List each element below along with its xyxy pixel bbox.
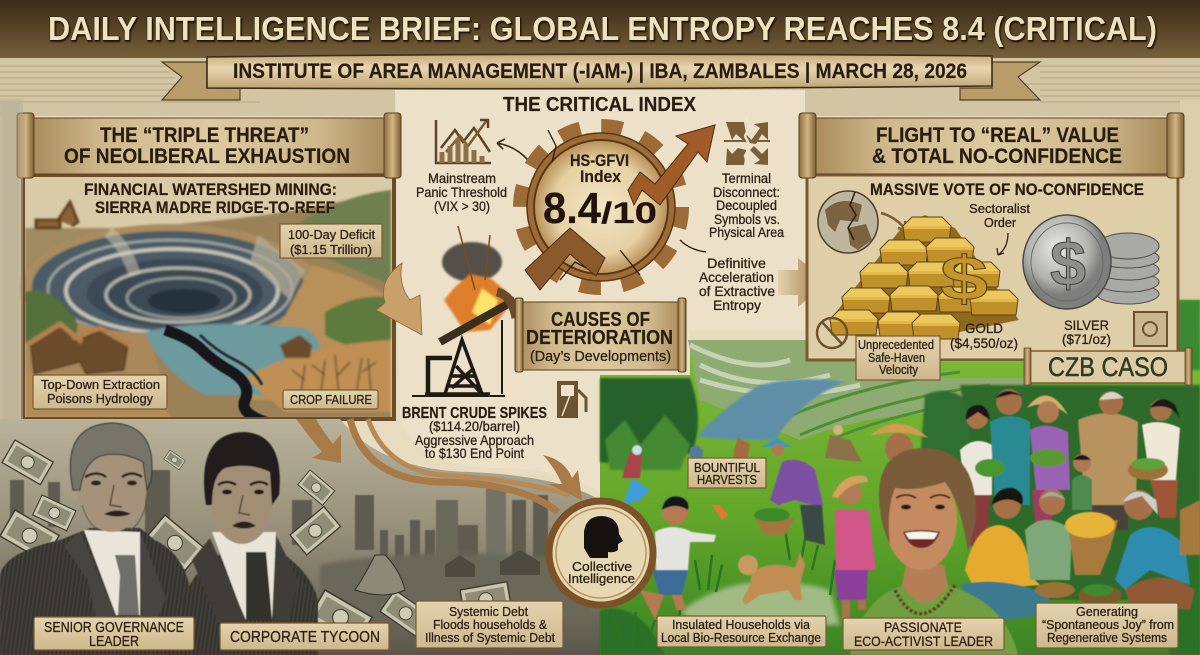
dog [738,552,805,605]
text: sectoralist order: Order [984,215,1017,230]
scene: regenerative community [600,300,1200,655]
text: definitive acceleration: Definitive [707,255,766,271]
label: systemic debt: Systemic Debt [449,604,528,619]
flooded paddy [680,581,840,625]
label: eco-activist leader: ECO-ACTIVIST LEADER [854,633,993,649]
callout: crop failure [283,390,378,409]
text: brent crude: ($114.20/barrel) [429,418,520,434]
falling bills [0,440,512,645]
text: sectoralist order [969,201,1030,255]
scroll: causes of deterioration: CAUSES OF [551,309,650,331]
text: definitive acceleration: Acceleration [699,269,774,285]
butterflies [623,478,728,520]
scroll: flight to real value [799,113,1184,178]
girl in pink [832,475,876,620]
label: safe-haven velocity [856,336,940,380]
heading: financial watershed mining [84,180,337,217]
scroll: triple threat: OF NEOLIBERAL EXHAUSTION [64,145,350,168]
label: senior governance leader: SENIOR GOVERNANCE [44,619,184,636]
collective intelligence badge: Intelligence [568,571,635,586]
callout: deficit: ($1.15 Trillion) [290,242,372,257]
text: definitive acceleration [699,255,775,313]
label: bountiful harvests [688,458,766,488]
river [700,379,845,440]
text: silver price: SILVER [1064,317,1109,333]
farmer in purple [754,438,825,545]
text: terminal disconnect: Physical Area [709,224,784,240]
gear index gauge: 8.4 [543,184,601,233]
jungle trees [600,300,1200,655]
label: safe-haven velocity: Safe-Haven [868,350,925,365]
text: terminal disconnect [709,170,784,240]
signature plate: CZB CASO [1048,352,1168,382]
text: terminal disconnect: Symbols vs. [714,211,780,227]
scroll: causes of deterioration [515,298,686,372]
scroll: flight to real value: FLIGHT TO “REAL” VALUE [876,124,1119,147]
man in straw hat [870,423,928,463]
arrow: rising entropy [628,125,715,205]
gear index gauge [521,125,715,290]
panel: financial watershed mining [20,175,394,447]
heading: financial watershed mining: FINANCIAL WATERSHED MINING: [84,180,337,199]
text: definitive acceleration: of Extractive [699,283,775,299]
callout: deficit [280,224,382,258]
label: insulated households: Insulated Households via [672,617,811,632]
scroll: causes of deterioration: (Day’s Developments) [530,348,671,365]
running boy [640,497,716,620]
callout: deficit: 100-Day Deficit [288,227,375,242]
group of villagers [960,389,1200,620]
text: terminal disconnect: Decoupled [716,197,777,213]
poisoned river [165,330,296,447]
label: spontaneous joy: “Spontaneous Joy” from [1042,617,1174,632]
scene: debt and collapse [0,100,600,655]
city skyline [10,470,548,565]
label: eco-activist leader [843,618,1004,650]
illustration: oil pump explosion [412,226,516,396]
arrow: to flight panel [778,258,828,307]
index heading: THE CRITICAL INDEX [503,94,697,116]
callout: extraction: Poisons Hydrology [47,391,153,406]
label: systemic debt [416,601,563,648]
callout: crop failure: CROP FAILURE [290,392,372,407]
silver coins [1023,215,1159,309]
label: systemic debt: Floods households & [433,617,547,632]
label: bountiful harvests: BOUNTIFUL [694,460,760,475]
label: systemic debt: Illness of Systemic Debt [425,630,555,645]
text: mainstream panic threshold: (VIX > 30) [434,198,490,214]
scroll: causes of deterioration: DETERIORATION [526,327,673,349]
text: mainstream panic threshold: Panic Threshold [416,184,507,200]
debt bag [355,555,405,595]
callout: extraction: Top-Down Extraction [41,377,160,392]
icon: fuel pump [557,381,586,418]
icon: cracked globe [818,191,906,253]
text: terminal disconnect: Disconnect: [713,184,780,200]
scroll: triple threat: THE “TRIPLE THREAT” [100,124,309,147]
panel: massive vote of no-confidence: MASSIVE VOTE OF NO-CONFIDENCE [870,180,1144,199]
gold pile [830,215,1019,339]
corporate tycoon figure [178,432,318,655]
center cream panel [395,90,805,492]
text: brent crude [402,405,547,461]
text: mainstream panic threshold [416,170,507,214]
icon: vault [1134,312,1167,346]
label: corporate tycoon [220,623,389,650]
text: brent crude: BRENT CRUDE SPIKES [402,405,547,422]
pumpjack [412,292,516,396]
icon: decoupled symbols [724,116,770,168]
label: eco-activist leader: PASSIONATE [884,619,962,635]
scroll: flight to real value: & TOTAL NO-CONFIDENCE [872,145,1122,168]
collective intelligence badge [549,501,653,605]
heading: financial watershed mining: SIERRA MADRE RIDGE-TO-REEF [95,198,335,217]
senior governance leader figure [0,423,190,655]
gear index gauge: HS-GFVI [570,151,629,170]
mine illustration [20,190,391,418]
subtitle ribbon [162,54,1040,100]
title band [0,0,1200,58]
text: sectoralist order: Sectoralist [969,201,1030,216]
passionate eco-activist leader figure [850,448,1018,655]
text: definitive acceleration: Entropy [713,297,761,313]
terraces [688,340,1030,440]
gear index gauge: /10 [601,197,657,230]
label: spontaneous joy [1036,603,1178,648]
text: mainstream panic threshold: Mainstream [428,170,496,186]
distant farmers [622,425,862,478]
scroll: triple threat [17,113,401,178]
text: brent crude: to $130 End Point [425,445,524,461]
label: insulated households [657,616,826,647]
icon: head with network [584,516,623,558]
panel: massive vote of no-confidence [807,175,1178,360]
label: corporate tycoon: CORPORATE TYCOON [230,629,380,646]
icon: market chart [436,120,528,163]
callout: extraction [33,375,167,409]
subtitle ribbon: INSTITUTE OF AREA MANAGEMENT (-IAM-) | IBA, ZAMBALES | MARCH 28, 2026 [233,60,967,83]
collective intelligence badge: Collective [572,559,632,574]
label: spontaneous joy: Generating [1076,604,1138,619]
gold pile: $ [940,245,988,314]
label: senior governance leader: LEADER [89,633,139,650]
flow arrows [296,419,582,512]
label: insulated households: Local Bio-Resource Exchange [661,630,821,645]
icon: no symbol [817,318,847,348]
text: gold price: ($4,550/oz) [950,335,1018,351]
gear index gauge: Index [580,167,621,186]
text: brent crude: Aggressive Approach [415,432,534,448]
label: safe-haven velocity: Velocity [879,362,918,377]
rice tufts [612,530,846,650]
label: bountiful harvests: HARVESTS [697,472,757,487]
text: silver price [1062,317,1111,347]
label: spontaneous joy: Regenerative Systems [1047,630,1167,645]
text: silver price: ($71/oz) [1062,331,1111,347]
text: terminal disconnect: Terminal [722,170,771,186]
silver coins: $ [1050,227,1086,299]
arrow: curved into explosion [376,263,422,335]
text: gold price: GOLD [965,320,1003,336]
signature plate [1024,348,1192,385]
label: safe-haven velocity: Unprecedented [858,337,934,352]
text: gold price [950,320,1018,351]
arrow: zigzag decline [525,228,605,290]
label: senior governance leader [34,617,194,650]
